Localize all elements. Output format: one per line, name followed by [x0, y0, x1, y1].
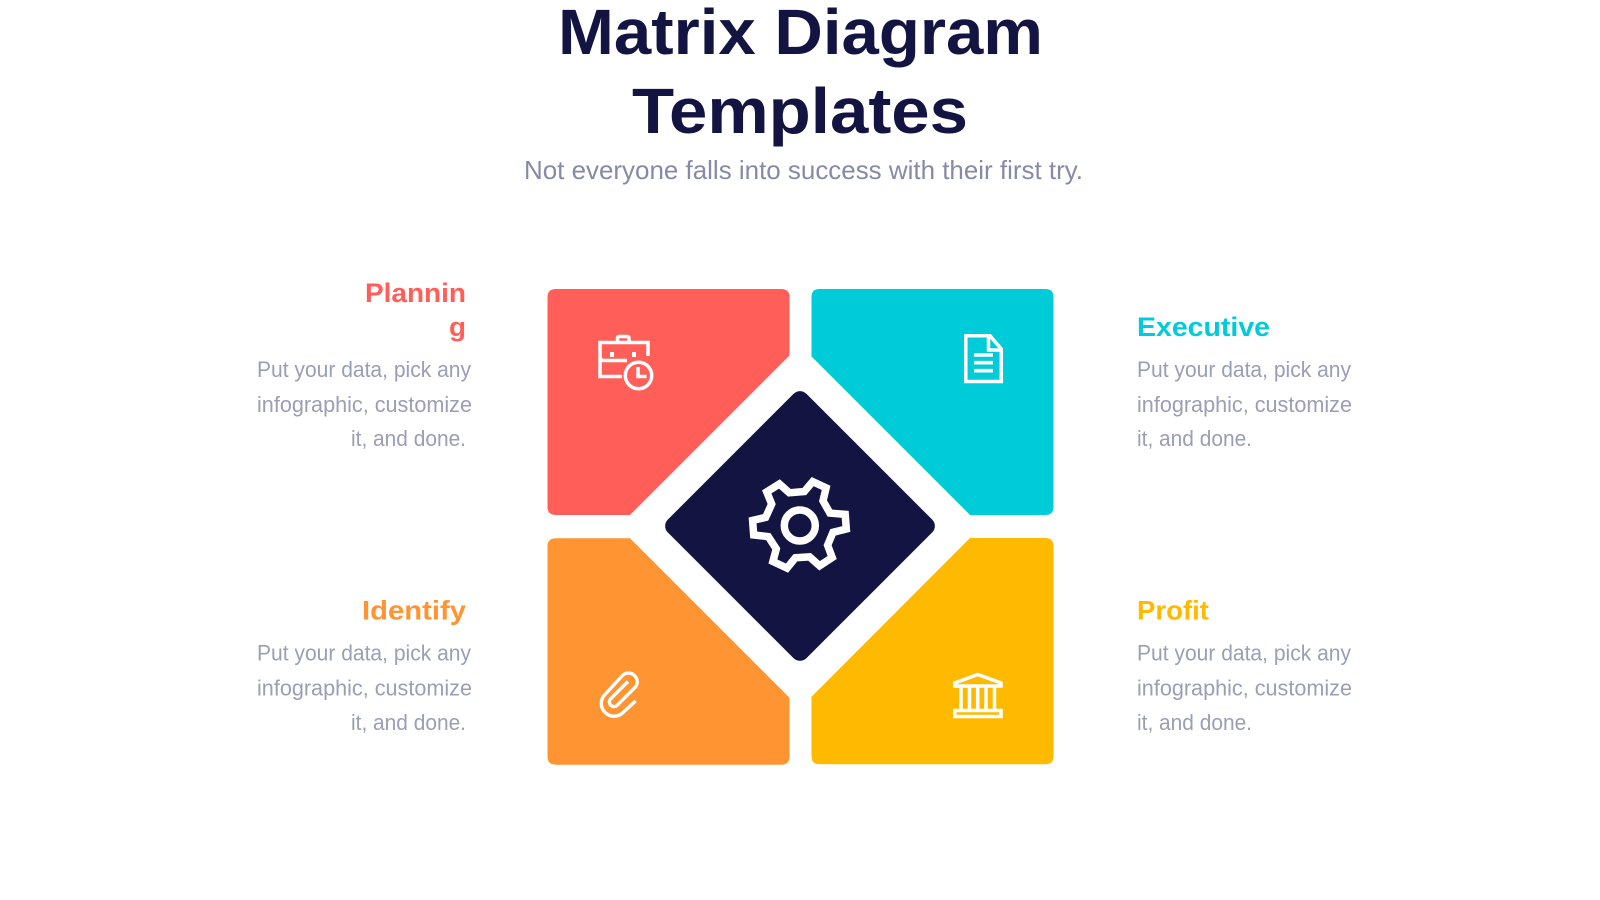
body: executive [1137, 357, 1352, 451]
panel: matrix diagram [548, 289, 1054, 765]
body: identify [257, 640, 472, 735]
navy diamond [661, 387, 939, 665]
heading: identify: Identify [362, 596, 466, 626]
heading: planning [365, 278, 466, 342]
panel: identify text [257, 596, 472, 735]
body: planning: infographic, customize [257, 392, 472, 417]
heading: planning: g [449, 312, 466, 342]
icon: document [966, 336, 1001, 382]
card: planning [548, 289, 790, 515]
teal shape [812, 289, 1054, 515]
body: identify: infographic, customize [257, 676, 472, 700]
icon: bank [955, 674, 1001, 716]
body: executive: infographic, customize [1137, 392, 1352, 417]
body: profit: infographic, customize [1137, 676, 1352, 700]
icon: paperclip [601, 673, 637, 716]
heading: profit: Profit [1137, 596, 1209, 626]
body: planning: it, and done. [351, 426, 466, 451]
heading: executive: Executive [1137, 312, 1270, 342]
panel: executive text [1137, 312, 1352, 451]
body: executive: it, and done. [1137, 426, 1252, 451]
card: profit [812, 538, 1054, 764]
yellow shape [812, 538, 1054, 764]
body: executive: Put your data, pick any [1137, 357, 1351, 382]
body: identify: it, and done. [351, 710, 466, 735]
card: identify [548, 538, 790, 765]
body: planning: Put your data, pick any [257, 357, 471, 382]
icon: briefcase with clock [600, 336, 652, 389]
icon: gear [753, 482, 846, 568]
body: identify: Put your data, pick any [257, 640, 471, 666]
title: Templates [632, 75, 968, 147]
red shape [548, 289, 790, 515]
title [558, 0, 1043, 147]
card: executive [812, 289, 1054, 515]
body: profit [1137, 640, 1352, 735]
center diamond [661, 387, 939, 665]
heading: planning: Plannin [365, 278, 466, 308]
subtitle: Not everyone falls into success with their first try. [524, 155, 1083, 185]
orange shape [548, 538, 790, 765]
body: planning [257, 357, 472, 451]
body: profit: Put your data, pick any [1137, 640, 1351, 666]
panel: profit text [1137, 596, 1352, 735]
body: profit: it, and done. [1137, 710, 1252, 735]
panel: planning text [257, 278, 472, 451]
